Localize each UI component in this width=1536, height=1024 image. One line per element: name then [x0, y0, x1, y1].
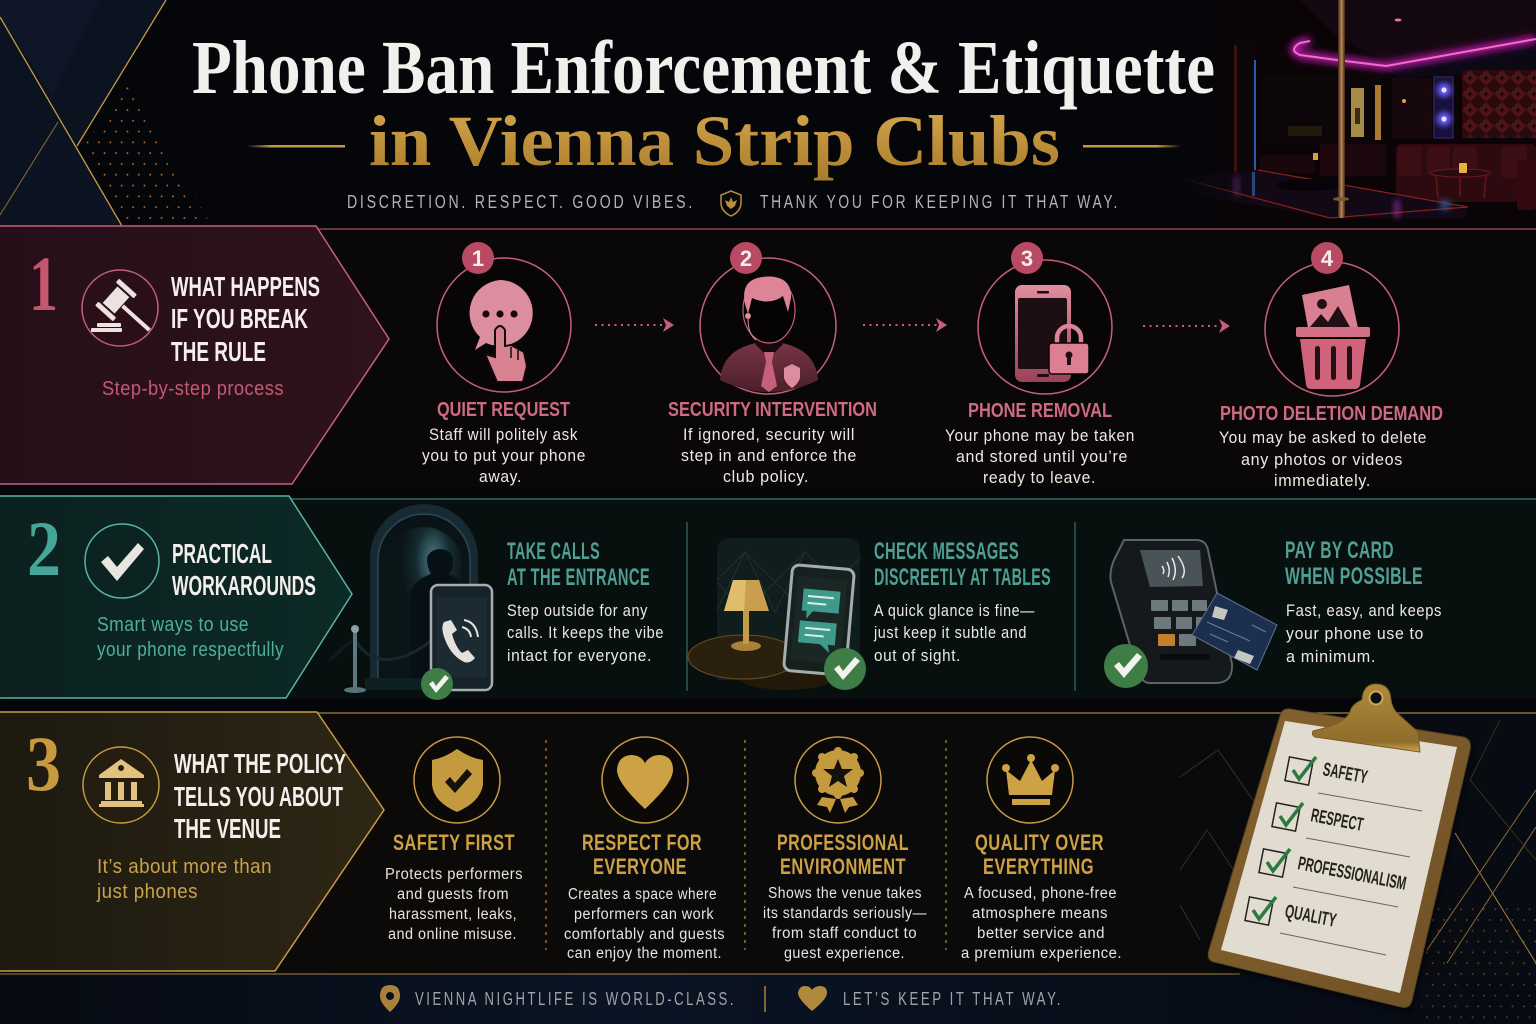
- section 3 heading: THE VENUE: [174, 813, 281, 844]
- tagline: [347, 191, 1120, 216]
- card: professional environment: guest experience.: [784, 945, 905, 962]
- card: quality over everything: A focused, phone-free: [964, 885, 1117, 902]
- step 1: quiet request: away.: [479, 467, 522, 486]
- tagline: DISCRETION. RESPECT. GOOD VIBES.: [347, 192, 695, 212]
- text: check messages: CHECK MESSAGES: [874, 538, 1019, 565]
- card: respect for everyone: RESPECT FOR: [582, 830, 702, 855]
- panel: section 1 what happens: [0, 226, 1536, 490]
- section 3 subheading: It’s about more than: [97, 856, 272, 878]
- card: quality over everything: [961, 737, 1122, 962]
- icon: check mark: [85, 524, 159, 598]
- icon: classical building: [83, 747, 159, 823]
- section 2 number: 2: [27, 505, 61, 592]
- title: Phone Ban Enforcement & Etiquette: [192, 26, 1215, 110]
- step 1: quiet request: you to put your phone: [422, 446, 586, 465]
- card: professional environment: PROFESSIONAL: [777, 830, 909, 855]
- card: quality over everything: atmosphere means: [972, 905, 1108, 922]
- checklist item: safety: [1285, 757, 1422, 811]
- step 3: phone removal: ready to leave.: [983, 468, 1096, 487]
- section 2 heading: [172, 538, 316, 601]
- section 2 heading: PRACTICAL: [172, 538, 272, 569]
- icon: gavel: [82, 270, 161, 346]
- checklist item: respect: [1272, 803, 1410, 857]
- section 1 heading: WHAT HAPPENS: [171, 271, 320, 302]
- card: safety first: [385, 737, 523, 943]
- panel: section 3 what the policy tells you: [0, 712, 1536, 1024]
- card: respect for everyone: performers can work: [574, 906, 714, 923]
- checklist item: quality: QUALITY: [1283, 901, 1338, 932]
- section 2 heading: WORKAROUNDS: [172, 570, 316, 601]
- card: respect for everyone: comfortably and guests: [564, 926, 725, 943]
- card: quality over everything: better service and: [977, 925, 1105, 942]
- clipboard checklist: [1208, 684, 1473, 1014]
- step 2: security intervention: 2: [740, 246, 752, 271]
- card: safety first: harassment, leaks,: [389, 906, 517, 923]
- section 3 heading: [174, 748, 346, 844]
- text: check messages: out of sight.: [874, 646, 961, 665]
- section 2 subheading: Smart ways to use: [97, 614, 249, 636]
- icon: location pin: [380, 985, 400, 1012]
- card: professional environment: Shows the venue takes: [768, 885, 922, 902]
- section 3 heading: TELLS YOU ABOUT: [174, 781, 343, 812]
- section 3 subheading: [96, 856, 272, 903]
- card: safety first: and guests from: [397, 886, 509, 903]
- card: respect for everyone: EVERYONE: [593, 854, 687, 879]
- card: respect for everyone: Creates a space where: [568, 886, 717, 903]
- card: quality over everything: EVERYTHING: [983, 854, 1094, 879]
- card: safety first: SAFETY FIRST: [393, 830, 515, 855]
- card: professional environment: from staff conduct to: [772, 925, 917, 942]
- section 3 heading: WHAT THE POLICY: [174, 748, 346, 779]
- step 3: phone removal: 3: [1021, 246, 1033, 271]
- section 3 subheading: just phones: [96, 881, 198, 903]
- text: check messages: [873, 538, 1051, 665]
- step 3: phone removal: PHONE REMOVAL: [968, 400, 1112, 422]
- step 4: photo deletion demand: PHOTO DELETION DEMAND: [1220, 403, 1443, 425]
- section 3 number: 3: [26, 720, 61, 807]
- venue photo: club interior with neon and pole: [1180, 0, 1536, 226]
- text: pay by card: WHEN POSSIBLE: [1285, 563, 1423, 590]
- step 2: security intervention: [668, 242, 877, 486]
- text: take calls: AT THE ENTRANCE: [507, 564, 650, 591]
- arrow 2 to 3: [863, 318, 947, 332]
- step 1: quiet request: 1: [472, 246, 484, 271]
- checklist item: respect: RESPECT: [1309, 805, 1365, 836]
- section 2 subheading: [97, 614, 284, 661]
- text: check messages: A quick glance is fine—: [874, 601, 1035, 620]
- step 2: security intervention: club policy.: [723, 467, 809, 486]
- card: professional environment: [763, 737, 927, 962]
- checklist item: professionalism: [1259, 849, 1408, 907]
- step 1: quiet request: Staff will politely ask: [429, 425, 578, 444]
- step 4: photo deletion demand: any photos or videos: [1241, 450, 1403, 469]
- text: take calls: Step outside for any: [507, 601, 648, 620]
- arrow 3 to 4: [1143, 319, 1230, 333]
- step 1: quiet request: [422, 242, 586, 486]
- step 3: phone removal: and stored until you’re: [956, 447, 1128, 466]
- step 4: photo deletion demand: You may be asked to delete: [1219, 428, 1427, 447]
- text: check messages: DISCREETLY AT TABLES: [874, 564, 1051, 591]
- step 4: photo deletion demand: [1219, 242, 1443, 490]
- arrow 1 to 2: [595, 318, 674, 332]
- header decoration: navy facets and gold lines: [0, 0, 208, 226]
- card: respect for everyone: [564, 737, 725, 962]
- title: in Vienna Strip Clubs: [369, 101, 1060, 181]
- step 4: photo deletion demand: 4: [1321, 246, 1334, 271]
- illustration: table lamp and phone messages: [688, 538, 866, 690]
- step 2: security intervention: If ignored, security will: [683, 425, 855, 444]
- text: take calls: calls. It keeps the vibe: [507, 623, 664, 642]
- card: professional environment: its standards seriously—: [763, 905, 927, 922]
- checklist item: professionalism: PROFESSIONALISM: [1296, 853, 1408, 895]
- card: professional environment: ENVIRONMENT: [780, 854, 906, 879]
- section 1 heading: THE RULE: [171, 336, 266, 367]
- illustration: entrance arch with phone call: [330, 504, 492, 700]
- section 2 subheading: your phone respectfully: [97, 639, 284, 661]
- title: [192, 26, 1215, 181]
- section 1 subheading: Step-by-step process: [102, 378, 284, 400]
- text: take calls: TAKE CALLS: [507, 538, 600, 565]
- card: quality over everything: QUALITY OVER: [975, 830, 1104, 855]
- icon: heart: [798, 986, 827, 1011]
- footer: [380, 985, 1063, 1012]
- text: take calls: [507, 538, 664, 665]
- section 1 heading: IF YOU BREAK: [171, 303, 308, 334]
- text: take calls: intact for everyone.: [507, 646, 652, 665]
- text: pay by card: Fast, easy, and keeps: [1286, 601, 1442, 620]
- section 1 number: 1: [29, 240, 58, 327]
- text: pay by card: PAY BY CARD: [1285, 537, 1394, 564]
- step 2: security intervention: step in and enforce the: [681, 446, 857, 465]
- text: check messages: just keep it subtle and: [873, 623, 1027, 642]
- card: respect for everyone: can enjoy the moment.: [567, 945, 722, 962]
- tagline: THANK YOU FOR KEEPING IT THAT WAY.: [760, 192, 1120, 212]
- step 3: phone removal: Your phone may be taken: [945, 426, 1135, 445]
- card: quality over everything: a premium experience.: [961, 945, 1122, 962]
- step 1: quiet request: QUIET REQUEST: [437, 399, 570, 421]
- clipboard clip: [1312, 684, 1420, 752]
- footer: VIENNA NIGHTLIFE IS WORLD-CLASS.: [415, 989, 736, 1009]
- bottom right decoration: gold lines and dots: [1180, 720, 1536, 1024]
- panel: section 2 practical workarounds: [0, 496, 1536, 700]
- step 2: security intervention: SECURITY INTERVENTION: [668, 399, 877, 421]
- step 4: photo deletion demand: immediately.: [1274, 471, 1371, 490]
- section 1 heading: [171, 271, 320, 367]
- footer: LET’S KEEP IT THAT WAY.: [843, 989, 1063, 1009]
- text: pay by card: your phone use to: [1286, 624, 1424, 643]
- card: safety first: Protects performers: [385, 866, 523, 883]
- text: pay by card: a minimum.: [1286, 647, 1376, 666]
- card: safety first: and online misuse.: [388, 926, 517, 943]
- step 3: phone removal: [945, 242, 1135, 487]
- checklist item: safety: SAFETY: [1321, 759, 1369, 789]
- illustration: card terminal: [1104, 540, 1277, 688]
- text: pay by card: [1285, 537, 1442, 666]
- checklist item: quality: [1245, 897, 1386, 955]
